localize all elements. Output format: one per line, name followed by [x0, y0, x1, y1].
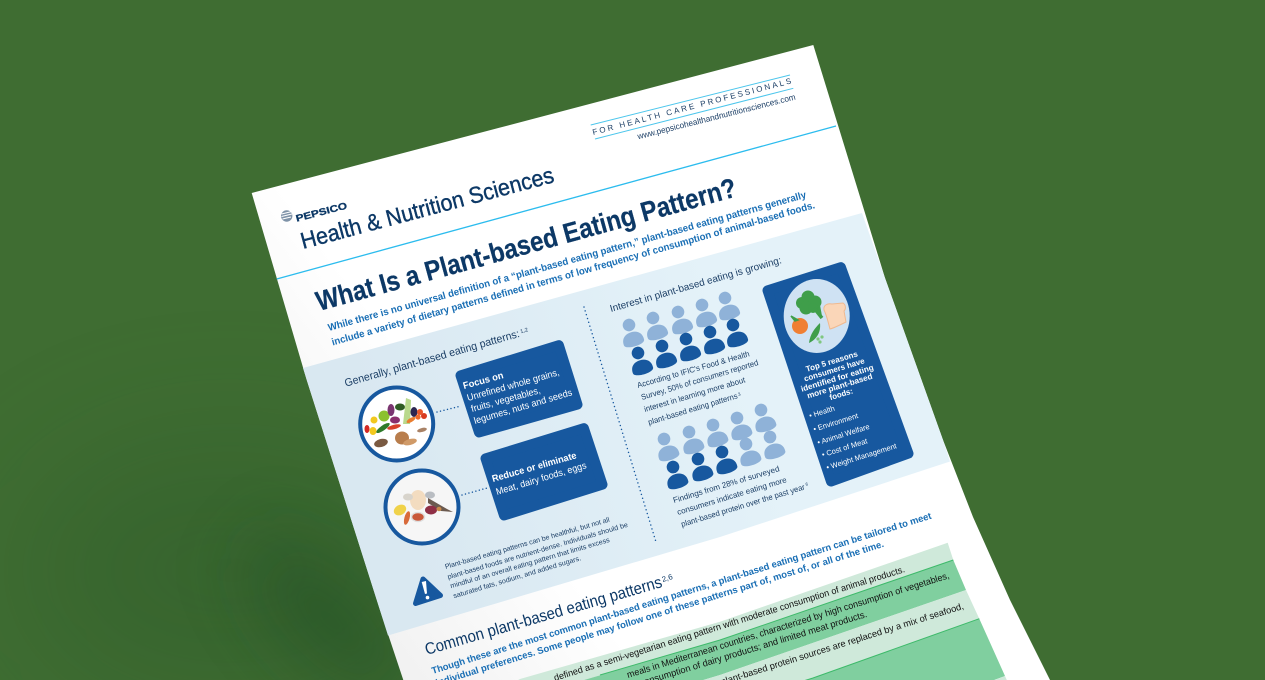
intro text: While there is no universal definition of a “plant-based eating pattern,” plant-based eating patterns generally [327, 190, 808, 334]
sidebar list: • Health [808, 404, 836, 420]
photo: plant foods [360, 388, 433, 460]
stat text: 28 percent: plant-based protein over the past year [680, 482, 806, 529]
box: reduce or eliminate: Reduce or eliminate [491, 450, 578, 485]
note text: Plant-based eating patterns can be healthful, but not all [444, 517, 611, 571]
sidebar list: • Environment [812, 411, 860, 434]
intro text: include a variety of dietary patterns defined in terms of low frequency of consumption of animal-based foods. [331, 200, 817, 348]
icon: warning triangle [416, 579, 440, 604]
row 1 text: defined as a semi-vegetarian eating pattern with moderate consumption of animal products. [553, 564, 906, 680]
logo wordmark: PEPSICO [295, 201, 348, 225]
stat text: 28 percent: consumers indicate eating more [676, 475, 788, 517]
sidebar heading: Top 5 reasons [805, 349, 859, 374]
icon: plate of plant foods [784, 279, 850, 353]
sidebar heading: more plant-based [806, 372, 874, 400]
stat text: 28 percent [672, 464, 809, 529]
header: audience tag: FOR HEALTH CARE PROFESSIONALS [592, 77, 792, 137]
light blue panel [303, 213, 950, 636]
box: reduce or eliminate [486, 428, 602, 516]
note text: mindful of an overall eating pattern that limits excess [450, 537, 611, 590]
note text [444, 517, 629, 600]
icon group: 28 percent of people [652, 401, 787, 491]
sidebar heading [800, 349, 875, 402]
stat text: 50 percent: 3 [737, 391, 742, 397]
title: What Is a Plant-based Eating Pattern? [312, 172, 740, 317]
intro to patterns: Though these are the most common plant-based eating patterns, a plant-based eating pattern can be tailored to meet [430, 511, 934, 677]
heading: common patterns: Common plant-based eating patterns [423, 573, 664, 659]
icon group: 50 percent of people [617, 289, 749, 377]
left section heading: 1,2 [520, 327, 529, 335]
note text: plant-based foods are nutrient-dense. Individuals should be [447, 522, 629, 581]
stat text: 28 percent: 6 [805, 481, 809, 487]
stat text: 50 percent: According to IFIC's Food & Health [636, 349, 751, 390]
sidebar heading: foods: [828, 386, 854, 402]
connector [462, 488, 487, 495]
row 2 text: meals in Mediterranean countries, characterized by high consumption of vegetables, [626, 570, 950, 680]
sidebar heading: identified for eating [800, 363, 875, 394]
header: website url: www.pepsicohealthandnutritionsciences.com [635, 92, 797, 141]
heading: common patterns: 2,6 [661, 572, 674, 584]
left section heading: Generally, plant-based eating patterns: [343, 328, 521, 390]
page shadow [20, 440, 440, 680]
right section heading: Interest in plant-based eating is growing: [609, 255, 783, 315]
box: focus on [460, 345, 578, 432]
note text: saturated fats, sodium, and added sugars. [453, 555, 582, 600]
stat text: 28 percent: Findings from 28% of surveyed [672, 464, 781, 505]
box: focus on: Unrefined whole grains, [466, 367, 561, 404]
sidebar: top 5 reasons [768, 267, 908, 482]
box: focus on: Focus on [462, 370, 505, 392]
icon: pepsico globe [281, 210, 292, 222]
sidebar list [808, 404, 899, 472]
sidebar heading: consumers have [803, 356, 866, 383]
stat text: 50 percent: Survey, 50% of consumers reported [640, 358, 759, 402]
sidebar list: • Weight Management [825, 441, 899, 472]
sidebar list: • Cost of Meat [821, 436, 869, 459]
box: reduce or eliminate: Meat, dairy foods, eggs [495, 460, 588, 498]
connector [437, 406, 461, 412]
document page [252, 45, 1050, 680]
pattern rows [500, 543, 1013, 680]
stat text: 50 percent: plant-based eating patterns [647, 391, 739, 427]
box: focus on: legumes, nuts and seeds [473, 387, 574, 427]
sidebar list: • Animal Welfare [816, 422, 871, 447]
photo: animal foods [386, 470, 458, 544]
header: logo [281, 201, 348, 225]
stat text: 50 percent [636, 349, 759, 427]
header: brand heading: Health & Nutrition Sciences [298, 162, 557, 254]
stat text: 50 percent: interest in learning more about [643, 375, 747, 414]
box: focus on: fruits, vegetables, [470, 385, 542, 415]
